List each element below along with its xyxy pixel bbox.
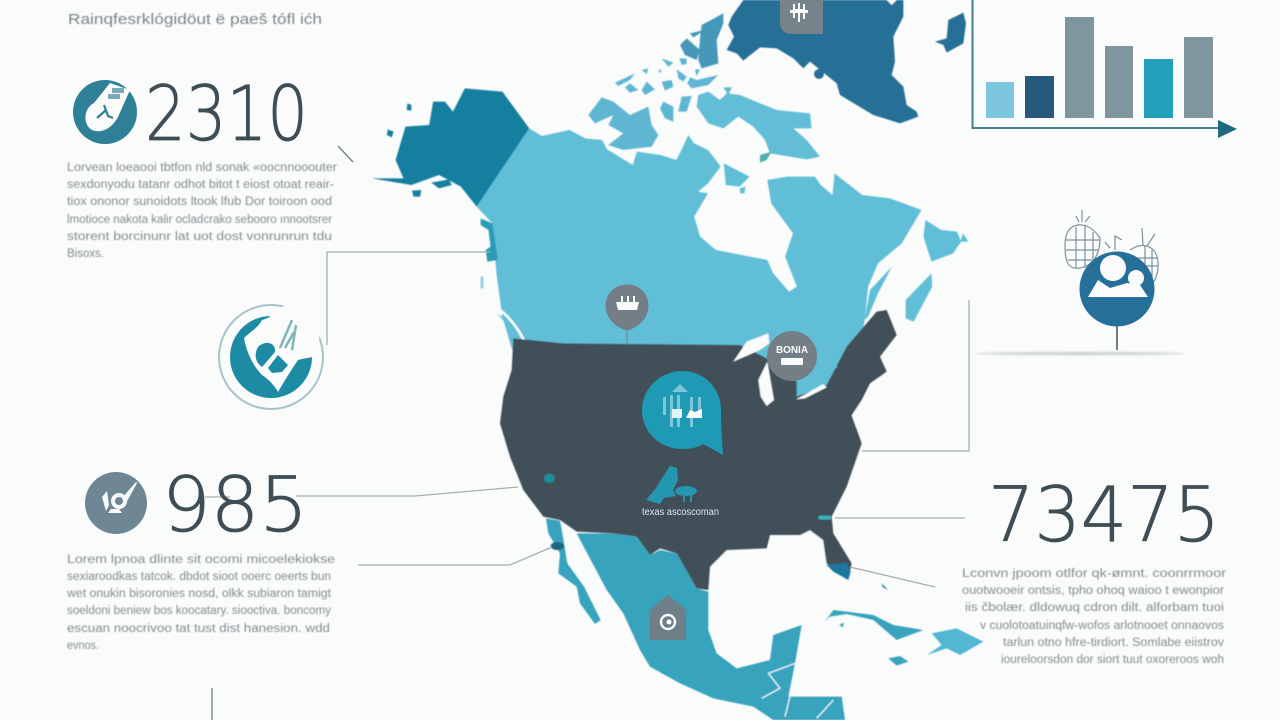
icon: pineapples bbox=[1065, 210, 1158, 285]
icon: community pin with pineapples bbox=[975, 210, 1185, 355]
icon: agriculture ring bbox=[219, 300, 323, 409]
region: United States bbox=[500, 310, 897, 590]
stat block: 985 bbox=[66, 460, 335, 652]
text block: ioureloorsdon dor siort tuut oxoreroos woh bbox=[1001, 654, 1224, 666]
text block: evnos. bbox=[67, 640, 99, 652]
map of North America bbox=[372, 0, 983, 720]
region: Canada bbox=[477, 128, 968, 407]
number: 2310 bbox=[145, 69, 308, 158]
pin: Great Lakes grey marker bbox=[767, 331, 817, 381]
text block: lmotioce nakota kalir ocladcrako sebooro ınnootsrer bbox=[67, 214, 332, 226]
pin: Greenland badge bbox=[780, 0, 823, 34]
pin: Mexico badge bbox=[650, 595, 686, 640]
Great Lakes bbox=[733, 333, 860, 428]
icon: trees with caption bbox=[642, 466, 719, 518]
connector lines bbox=[205, 146, 969, 720]
text block: v cuolotoatuinqfw-wofos arlotnooet onnaovos bbox=[980, 620, 1224, 632]
title: Rainqfesrklógidöut ë paeš tófl ićh bbox=[68, 11, 322, 28]
Central America borders bbox=[762, 663, 833, 718]
region: Arctic islands bbox=[588, 13, 820, 163]
text block: ouotwooeir ontsis, tpho ohoq waioo t ewonpior bbox=[962, 585, 1224, 597]
text block: Lorvean loeaooi tbtfon nld sonak «oocnnooouter bbox=[67, 162, 337, 174]
text block bbox=[67, 162, 337, 260]
text block: iis čbolær. dldowuq cdron dilt. alforbam tuoi bbox=[965, 602, 1224, 614]
icon: trees with caption: texas ascoscoman bbox=[642, 507, 719, 518]
text block: sexdonyodu tatanr odhot bitot t eiost otoat reair- bbox=[67, 179, 334, 191]
text block: sexiaroodkas tatcok. dbdot sioot ooerc oeerts bun bbox=[67, 571, 331, 583]
text block: tiox ononor sunoidots ltook lfub Dor toiroon ood bbox=[67, 196, 332, 208]
region: British Columbia coast bbox=[481, 218, 498, 288]
icon: stat 985 bbox=[85, 472, 147, 534]
text block: escuan noocrivoo tat tust dist hanesion. wdd bbox=[67, 623, 330, 635]
text block bbox=[66, 554, 335, 652]
region: Caribbean islands bbox=[825, 583, 983, 666]
text block: wet onukin bisoronies nosd, olkk subiaron tamigt bbox=[66, 588, 332, 600]
region: Alaska bbox=[372, 88, 529, 207]
text block: Bisoxs. bbox=[67, 248, 104, 260]
text block: soeldoni beniew bos koocatary. siooctiva. boncomy bbox=[67, 605, 331, 617]
chart axes bbox=[972, 0, 1222, 128]
stat block: 2310 bbox=[67, 69, 337, 260]
text block: Lconvn jpoom otlfor qk-ømnt. coonrrmoor bbox=[962, 568, 1226, 580]
location dots bbox=[544, 474, 555, 483]
number: 73475 bbox=[988, 470, 1220, 559]
speech bubble: United States bbox=[642, 371, 723, 455]
text block bbox=[962, 568, 1226, 666]
icon: stat 2310 bbox=[73, 80, 137, 144]
region: Greenland bbox=[727, 0, 966, 123]
pin: Canada grey marker bbox=[606, 285, 648, 345]
text block: storent borcinunr lat uot dost vonrunrun tdu bbox=[67, 231, 332, 243]
region: Mexico and Central America bbox=[546, 518, 845, 720]
pin: Great Lakes grey marker: BONIA bbox=[776, 345, 808, 356]
chart bars bbox=[986, 17, 1213, 118]
stat block: 73475 bbox=[962, 470, 1226, 666]
bar chart bbox=[972, 0, 1237, 138]
text block: Lorem lpnoa dlinte sit ocomi micoelekiokse bbox=[67, 554, 335, 566]
number: 985 bbox=[162, 460, 308, 549]
text block: tarlun otno hfre-tirdiort. Somlabe eiistrov bbox=[1003, 637, 1224, 649]
arrow: chart axis bbox=[1218, 120, 1237, 138]
